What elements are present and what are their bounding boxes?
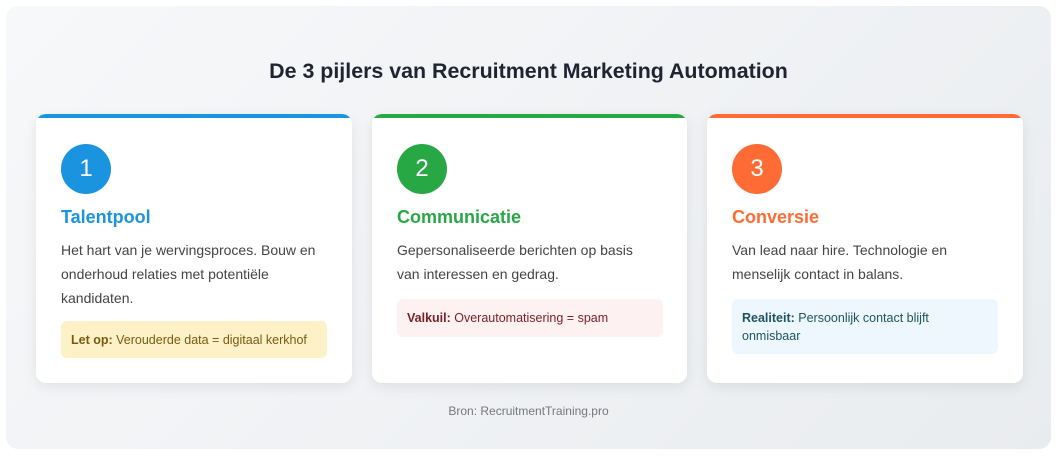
panel: communicatie bbox=[372, 114, 687, 383]
panel: talentpool bbox=[36, 114, 352, 383]
callout: valkuil: Valkuil: Overautomatisering = spam bbox=[407, 311, 608, 325]
icon: number 2 bbox=[397, 144, 447, 194]
callout: realiteit bbox=[732, 299, 998, 354]
icon: number 1 bbox=[61, 144, 111, 194]
callout: realiteit: Realiteit: Persoonlijk contact blijft onmisbaar bbox=[742, 311, 929, 343]
heading: communicatie: Communicatie bbox=[397, 207, 521, 227]
text: communicatie: Gepersonaliseerde berichten op basis van interessen en gedrag. bbox=[397, 242, 633, 282]
icon: number 3: 3 bbox=[750, 155, 764, 182]
icon: number 3 bbox=[732, 144, 782, 194]
icon: number 2: 2 bbox=[415, 155, 429, 182]
callout: let op: Let op: Verouderde data = digitaal kerkhof bbox=[71, 333, 307, 347]
callout: let op bbox=[61, 321, 327, 358]
title: De 3 pijlers van Recruitment Marketing Automation bbox=[269, 59, 788, 83]
text: talentpool: Het hart van je wervingsproces. Bouw en onderhoud relaties met potentiële kandidaten. bbox=[61, 242, 315, 306]
text: conversie: Van lead naar hire. Technologie en menselijk contact in balans. bbox=[732, 242, 947, 282]
heading: conversie: Conversie bbox=[732, 207, 819, 227]
callout: valkuil bbox=[397, 299, 663, 337]
panel: conversie bbox=[707, 114, 1023, 383]
source: Bron: RecruitmentTraining.pro bbox=[448, 404, 609, 418]
icon: number 1: 1 bbox=[79, 155, 93, 182]
heading: talentpool: Talentpool bbox=[61, 207, 151, 227]
